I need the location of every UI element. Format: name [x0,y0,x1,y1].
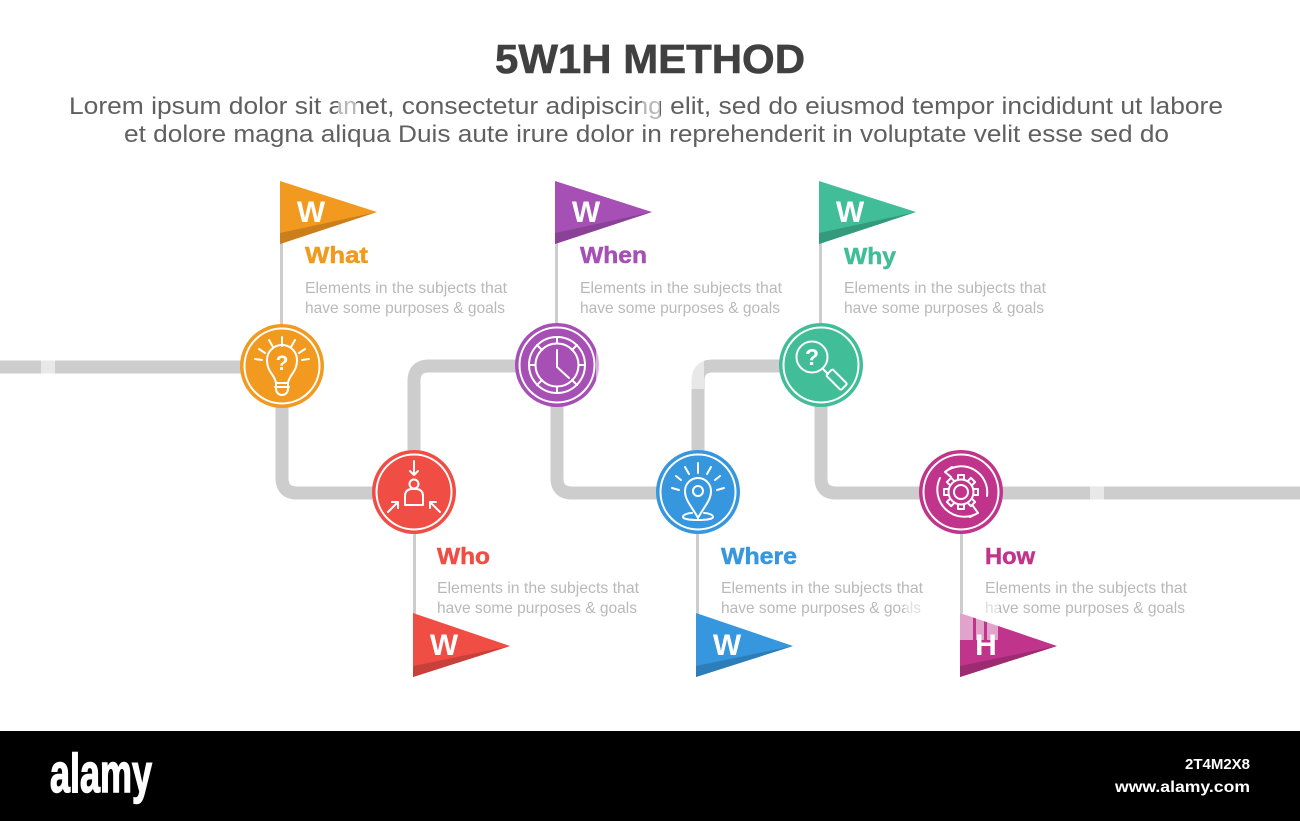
alamy logo: alamy [50,742,152,804]
icon: location pin [656,450,740,534]
description: Why [844,280,1047,317]
heading: Who: Who [437,543,490,569]
watermark wash [41,95,1104,640]
description: Who: have some purposes & goals [437,600,637,617]
image id: 2T4M2X8 [1185,756,1250,773]
icon: light bulb question: ? [276,352,288,375]
website: www.alamy.com [1114,779,1250,796]
description: Who: Elements in the subjects that [437,580,640,597]
flag: Who: W [430,629,459,662]
heading: What: What [305,242,368,268]
icon: light bulb question [240,324,324,408]
heading: Why: Why [844,243,896,269]
icon: person with arrows [372,450,456,534]
description: Why: Elements in the subjects that [844,280,1047,297]
description: Who [437,580,640,617]
description: When: Elements in the subjects that [580,280,783,297]
flag: What [280,181,377,244]
description: What [305,280,508,317]
description: Why: have some purposes & goals [844,300,1044,317]
description: How [985,580,1188,617]
description: What: have some purposes & goals [305,300,505,317]
stock photo footer bar [0,731,1300,821]
flag: Why: W [836,196,865,229]
subtitle text [69,93,1223,148]
winding road path [0,366,1300,493]
step: Why [779,181,1047,407]
flag: What: W [297,196,326,229]
description: What: Elements in the subjects that [305,280,508,297]
description: When [580,280,783,317]
icon: magnifier question: ? [805,344,819,370]
icon: magnifier question [779,323,863,407]
description: When: have some purposes & goals [580,300,780,317]
description: Where: have some purposes & goals [721,600,921,617]
step: Who [372,450,640,677]
step: When [515,181,783,407]
heading: How: How [985,543,1035,569]
subtitle text: Lorem ipsum dolor sit amet, consectetur adipiscing elit, sed do eiusmod tempor incididunt ut labore [69,93,1223,120]
step: How [919,450,1188,677]
subtitle text: et dolore magna aliqua Duis aute irure dolor in reprehenderit in voluptate velit esse sed do [124,121,1169,148]
description: How: Elements in the subjects that [985,580,1188,597]
icon: gear cycle [919,450,1003,534]
heading: Where: Where [721,543,797,569]
flag: Who [413,613,510,677]
flag: Where: W [713,629,742,662]
title: 5W1H METHOD [495,36,805,82]
flag: How [960,613,1057,677]
icon: clock [515,323,599,407]
description: How: have some purposes & goals [985,600,1185,617]
flag poles [280,240,963,616]
step: What [240,181,508,408]
flag: When [555,181,652,244]
step: Where [656,450,924,677]
description: Where [721,580,924,617]
flag: How: H [975,629,997,662]
description: Where: Elements in the subjects that [721,580,924,597]
flag: Where [696,613,793,677]
flag: Why [819,181,916,244]
flag: When: W [572,196,601,229]
heading: When: When [580,242,647,268]
